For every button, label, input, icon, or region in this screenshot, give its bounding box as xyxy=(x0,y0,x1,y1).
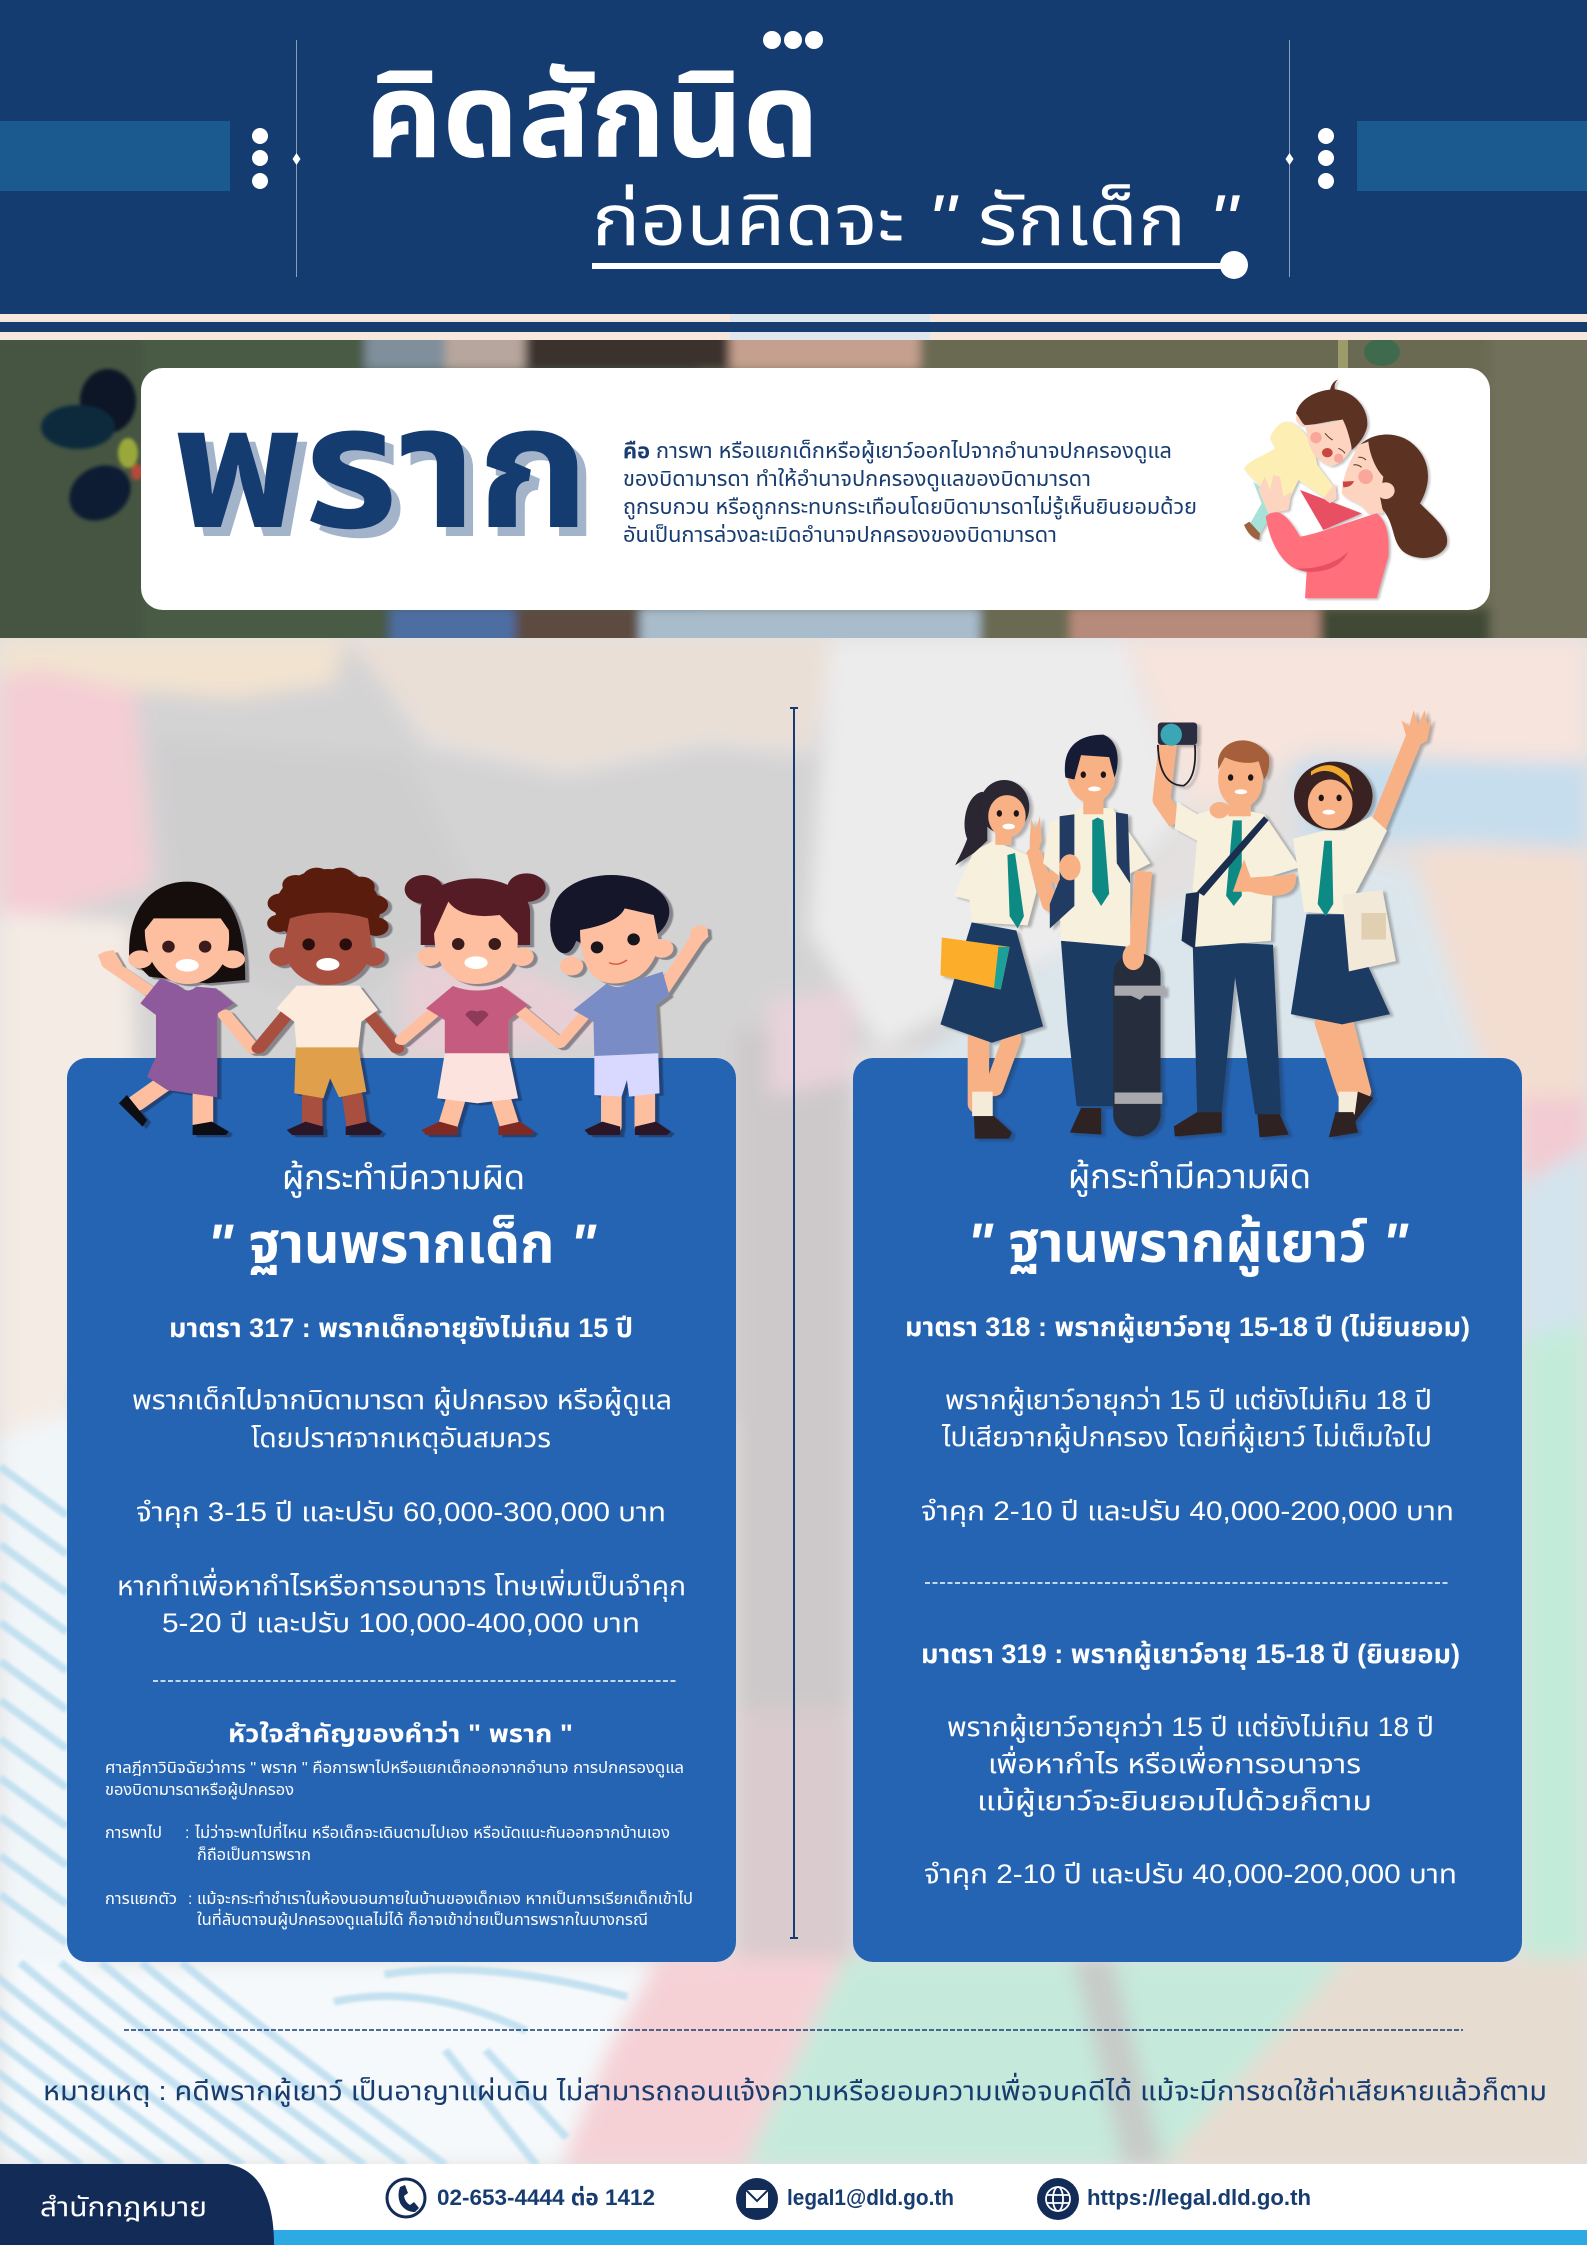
definition text: คือ การพา หรือแยกเด็กหรือผู้เยาว์ออกไปจากอำนาจปกครองดูแล xyxy=(623,438,1172,464)
section 319 description xyxy=(947,1712,1434,1817)
section 317 description: พรากเด็กไปจากบิดามารดา ผู้ปกครอง หรือผู้ดูแล xyxy=(132,1385,672,1416)
header decorative dots and rules xyxy=(252,31,1334,277)
icon: website globe xyxy=(1037,2178,1079,2220)
key point explanation: การแยกตัว xyxy=(105,1891,177,1908)
left panel text xyxy=(105,1159,693,1929)
section 317 description xyxy=(132,1385,672,1454)
definition text: ถูกรบกวน หรือถูกกระทบกระเทือนโดยบิดามารดาไม่รู้เห็นยินยอมด้วย xyxy=(623,494,1197,520)
key point explanation: ศาลฎีกาวินิจฉัยว่าการ " พราก " คือการพาไปหรือแยกเด็กออกจากอำนาจ การปกครองดูแล xyxy=(105,1759,684,1777)
key point explanation: ในที่ลับตาจนผู้ปกครองดูแลไม่ได้ ก็อาจเข้าข่ายเป็นการพรากในบางกรณี xyxy=(197,1908,648,1929)
key point explanation: : xyxy=(188,1891,192,1908)
title: คิดสักนิด xyxy=(365,51,819,183)
subtitle: ก่อนคิดจะ " รักเด็ก " xyxy=(592,181,1241,261)
key point explanation: ไม่ว่าจะพาไปที่ไหน หรือเด็กจะเดินตามไปเอง หรือนัดแนะกันออกจากบ้านเอง xyxy=(194,1821,670,1842)
section 319 description: แม้ผู้เยาว์จะยินยอมไปด้วยก็ตาม xyxy=(977,1786,1372,1817)
section 319 penalty: จำคุก 2-10 ปี และปรับ 40,000-200,000 บาท xyxy=(924,1859,1457,1890)
website address: https://legal.dld.go.th xyxy=(1087,2185,1311,2210)
section 317 heading: มาตรา 317 : พรากเด็กอายุยังไม่เกิน 15 ปี xyxy=(169,1313,633,1344)
icon: phone xyxy=(387,2179,425,2217)
key point explanation: แม้จะกระทำชำเราในห้องนอนภายในบ้านของเด็กเอง หากเป็นการเรียกเด็กเข้าไป xyxy=(197,1890,693,1908)
section 317 aggravated penalty: หากทำเพื่อหากำไรหรือการอนาจาร โทษเพิ่มเป็นจำคุก xyxy=(117,1567,686,1602)
panel: child abduction offence xyxy=(67,1058,736,1962)
header band xyxy=(0,0,1587,314)
left overline: ผู้กระทำมีความผิด xyxy=(282,1159,525,1198)
key point explanation: : xyxy=(185,1825,189,1842)
footer office name: สำนักกฎหมาย xyxy=(40,2192,207,2222)
section 319 description: พรากผู้เยาว์อายุกว่า 15 ปี แต่ยังไม่เกิน 18 ปี xyxy=(947,1712,1434,1743)
section 317 description: โดยปราศจากเหตุอันสมควร xyxy=(251,1423,551,1454)
right panel text xyxy=(905,1158,1470,1890)
subtitle underline with end dot xyxy=(592,251,1248,279)
definition text: ของบิดามารดา ทำให้อำนาจปกครองดูแลของบิดามารดา xyxy=(623,467,1091,492)
key point heading: หัวใจสำคัญของคำว่า " พราก " xyxy=(228,1720,573,1748)
footnote: หมายเหตุ : คดีพรากผู้เยาว์ เป็นอาญาแผ่นดิน ไม่สามารถถอนแจ้งความหรือยอมความเพื่อจบคดีได้ แม้จะมีการชดใช้ค่าเสียหายแล้วก็ตาม xyxy=(43,2072,1547,2107)
panel: definition card xyxy=(141,368,1490,610)
section 317 penalty: จำคุก 3-15 ปี และปรับ 60,000-300,000 บาท xyxy=(136,1497,666,1528)
right heading: " ฐานพรากผู้เยาว์ " xyxy=(967,1211,1409,1277)
section 318 penalty: จำคุก 2-10 ปี และปรับ 40,000-200,000 บาท xyxy=(921,1496,1454,1527)
background photo wash xyxy=(0,638,1587,2165)
photo band: family in a field xyxy=(0,340,1587,638)
left heading: " ฐานพรากเด็ก " xyxy=(207,1212,597,1275)
section 319 heading: มาตรา 319 : พรากผู้เยาว์อายุ 15-18 ปี (ยินยอม) xyxy=(921,1639,1460,1670)
key point explanation: ก็ถือเป็นการพราก xyxy=(197,1846,311,1864)
section 318 description xyxy=(941,1385,1432,1453)
icon: email xyxy=(736,2178,778,2220)
section 318 heading: มาตรา 318 : พรากผู้เยาว์อายุ 15-18 ปี (ไม่ยินยอม) xyxy=(905,1312,1470,1343)
definition text xyxy=(623,438,1197,547)
key point explanation: การพาไป xyxy=(105,1825,162,1842)
icon: mother lifting child xyxy=(1244,379,1447,598)
center divider xyxy=(790,708,798,1938)
heading: big word: พราก xyxy=(172,372,590,564)
illustration: four children holding hands xyxy=(98,868,708,1135)
key point explanation xyxy=(105,1759,693,1929)
illustration: four students xyxy=(940,710,1431,1139)
heading: big word shadow: พราก xyxy=(181,381,599,573)
section 317 aggravated penalty: 5-20 ปี และปรับ 100,000-400,000 บาท xyxy=(162,1608,640,1638)
panel: minor abduction offence xyxy=(853,1058,1522,1962)
section 317 aggravated penalty xyxy=(117,1567,686,1638)
email address: legal1@dld.go.th xyxy=(787,2185,954,2210)
thin photo strips beside navy bar xyxy=(0,314,1587,340)
section 318 description: ไปเสียจากผู้ปกครอง โดยที่ผู้เยาว์ ไม่เต็มใจไป xyxy=(941,1418,1432,1453)
key point explanation: ของบิดามารดาหรือผู้ปกครอง xyxy=(105,1782,294,1799)
section 318 description: พรากผู้เยาว์อายุกว่า 15 ปี แต่ยังไม่เกิน 18 ปี xyxy=(945,1385,1432,1416)
footer bar xyxy=(0,2164,1587,2245)
right overline: ผู้กระทำมีความผิด xyxy=(1068,1158,1311,1197)
section 319 description: เพื่อหากำไร หรือเพื่อการอนาจาร xyxy=(988,1745,1361,1779)
definition text: อันเป็นการล่วงละเมิดอำนาจปกครองของบิดามารดา xyxy=(623,523,1057,547)
phone number: 02-653-4444 ต่อ 1412 xyxy=(437,2185,655,2210)
